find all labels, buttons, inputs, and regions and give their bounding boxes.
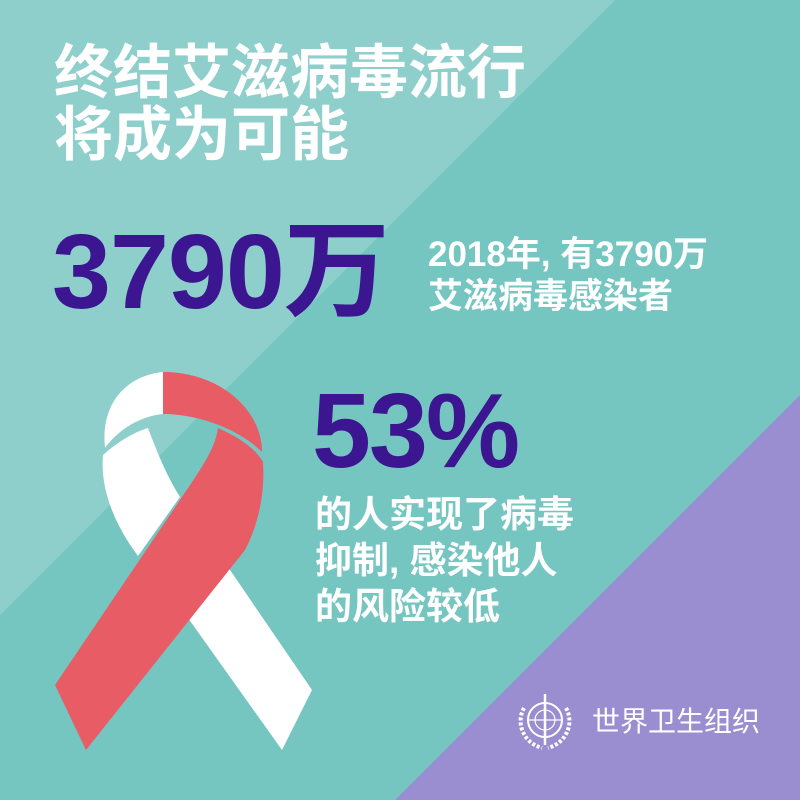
- red band: [55, 428, 263, 750]
- title: [54, 40, 526, 168]
- text: viral suppression: 的人实现了病毒: [315, 494, 574, 535]
- big number 3790万: 3790万: [52, 213, 389, 331]
- red top-right loop: [163, 372, 262, 452]
- text: 2018 infections: [428, 235, 708, 316]
- title: 终结艾滋病毒流行: [54, 40, 526, 106]
- text: viral suppression: 抑制, 感染他人: [315, 540, 558, 581]
- text: viral suppression: [315, 494, 574, 627]
- white top-left loop: [104, 372, 163, 448]
- white left leg: [103, 428, 180, 556]
- logo: WHO: [518, 694, 760, 750]
- title: 将成为可能: [54, 102, 349, 168]
- logo text: 世界卫生组织: [592, 706, 760, 737]
- white lower right leg: [188, 567, 312, 750]
- text: 2018 infections: 2018年, 有3790万: [428, 235, 708, 274]
- text: viral suppression: 的风险较低: [315, 586, 500, 627]
- big number 53%: 53%: [312, 372, 518, 490]
- icon: awareness ribbon: [55, 372, 312, 750]
- text: 2018 infections: 艾滋病毒感染者: [428, 277, 673, 316]
- icon: WHO emblem: [518, 694, 572, 750]
